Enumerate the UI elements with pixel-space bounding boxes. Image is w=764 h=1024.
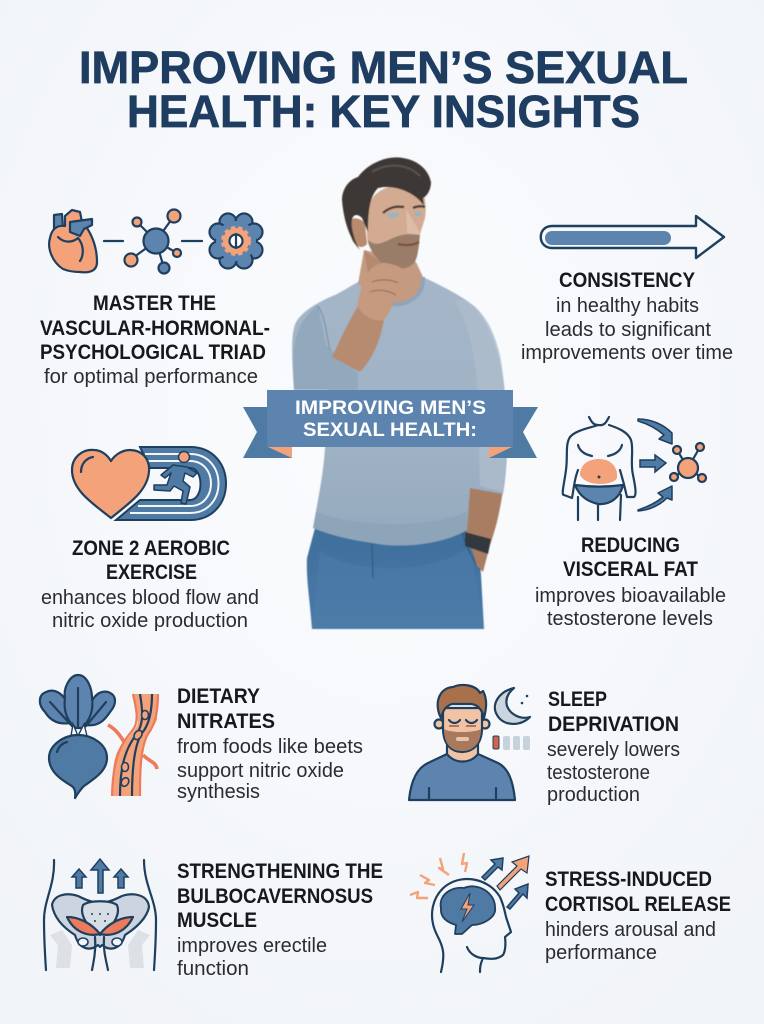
text: stress cortisol: hinders arousal and xyxy=(545,919,716,941)
text: visceral fat: improves bioavailable xyxy=(535,585,726,607)
text: dietary nitrates xyxy=(177,685,363,803)
text: sleep deprivation: severely lowers xyxy=(547,739,680,761)
title: HEALTH: KEY INSIGHTS xyxy=(127,86,640,137)
text: zone 2: enhances blood flow and xyxy=(41,587,259,609)
text: sleep deprivation: SLEEP xyxy=(548,688,607,711)
text: sleep deprivation: testosterone xyxy=(547,762,650,784)
text: consistency xyxy=(521,269,733,364)
hand on chin xyxy=(357,263,404,320)
icon: beet and blood vessel xyxy=(40,675,158,798)
text: bulbocavernosus: improves erectile xyxy=(177,935,327,957)
left forearm xyxy=(332,306,384,372)
eyes and mouth xyxy=(383,206,425,213)
banner xyxy=(243,390,538,458)
icon: visceral fat xyxy=(563,417,706,520)
central photo: man in grey shirt xyxy=(292,157,507,629)
text: sleep deprivation: production xyxy=(547,784,640,806)
torso and sleeves xyxy=(292,277,507,545)
text: stress cortisol: CORTISOL RELEASE xyxy=(545,893,731,916)
text: consistency: in healthy habits xyxy=(556,295,699,317)
icon: consistency arrow xyxy=(541,216,724,258)
title: IMPROVING MEN’S SEXUAL xyxy=(79,42,688,93)
text: bulbocavernosus xyxy=(177,860,383,980)
text: consistency: leads to significant xyxy=(545,319,711,341)
banner text: IMPROVING MEN’S xyxy=(295,397,486,419)
title xyxy=(79,42,688,137)
text: triad: MASTER THE xyxy=(93,292,216,315)
icon: pelvis and muscle arrows xyxy=(44,859,156,970)
text: bulbocavernosus: BULBOCAVERNOSUS xyxy=(177,885,373,908)
text: stress cortisol xyxy=(545,868,731,964)
text: visceral fat: VISCERAL FAT xyxy=(563,558,698,581)
banner folds xyxy=(268,447,292,458)
text: visceral fat: REDUCING xyxy=(581,534,680,557)
text: dietary nitrates: DIETARY xyxy=(177,685,260,708)
text: stress cortisol: STRESS-INDUCED xyxy=(545,868,712,891)
watch xyxy=(465,532,491,554)
text: zone 2: ZONE 2 AEROBIC xyxy=(72,537,230,560)
text: zone 2: nitric oxide production xyxy=(52,610,248,632)
text: consistency: CONSISTENCY xyxy=(559,269,695,292)
banner body xyxy=(267,390,513,447)
text: sleep deprivation: DEPRIVATION xyxy=(548,713,679,736)
text: consistency: improvements over time xyxy=(521,342,733,364)
text: triad: for optimal performance xyxy=(44,366,258,388)
hair xyxy=(342,157,431,250)
text: visceral fat: testosterone levels xyxy=(547,608,713,630)
text: zone 2: EXERCISE xyxy=(106,561,197,584)
text: visceral fat xyxy=(535,534,726,630)
text: dietary nitrates: synthesis xyxy=(177,781,260,803)
text: zone 2 xyxy=(41,537,259,632)
text: dietary nitrates: support nitric oxide xyxy=(177,760,344,782)
text: dietary nitrates: NITRATES xyxy=(177,710,275,733)
banner: SEXUAL HEALTH: xyxy=(303,419,477,441)
icon: heart, molecule, brain triad xyxy=(49,210,262,274)
text: sleep deprivation xyxy=(547,688,680,806)
collar xyxy=(382,277,423,304)
text: triad: VASCULAR-HORMONAL- xyxy=(40,317,270,340)
ear xyxy=(348,218,367,247)
text: triad xyxy=(40,292,270,388)
banner tails xyxy=(243,407,292,458)
face xyxy=(367,186,426,269)
text: bulbocavernosus: function xyxy=(177,958,249,980)
right forearm and hand xyxy=(466,485,503,572)
icon: heart and running track xyxy=(72,447,226,520)
neck xyxy=(358,250,423,303)
text: bulbocavernosus: MUSCLE xyxy=(177,909,257,932)
text: stress cortisol: performance xyxy=(545,942,657,964)
text: dietary nitrates: from foods like beets xyxy=(177,736,363,758)
text: bulbocavernosus: STRENGTHENING THE xyxy=(177,860,383,883)
text: triad: PSYCHOLOGICAL TRIAD xyxy=(40,341,266,364)
icon: tired man with low battery xyxy=(409,685,530,800)
icon: stressed head and brain xyxy=(410,853,529,972)
pants xyxy=(307,526,484,629)
beard xyxy=(367,234,420,269)
